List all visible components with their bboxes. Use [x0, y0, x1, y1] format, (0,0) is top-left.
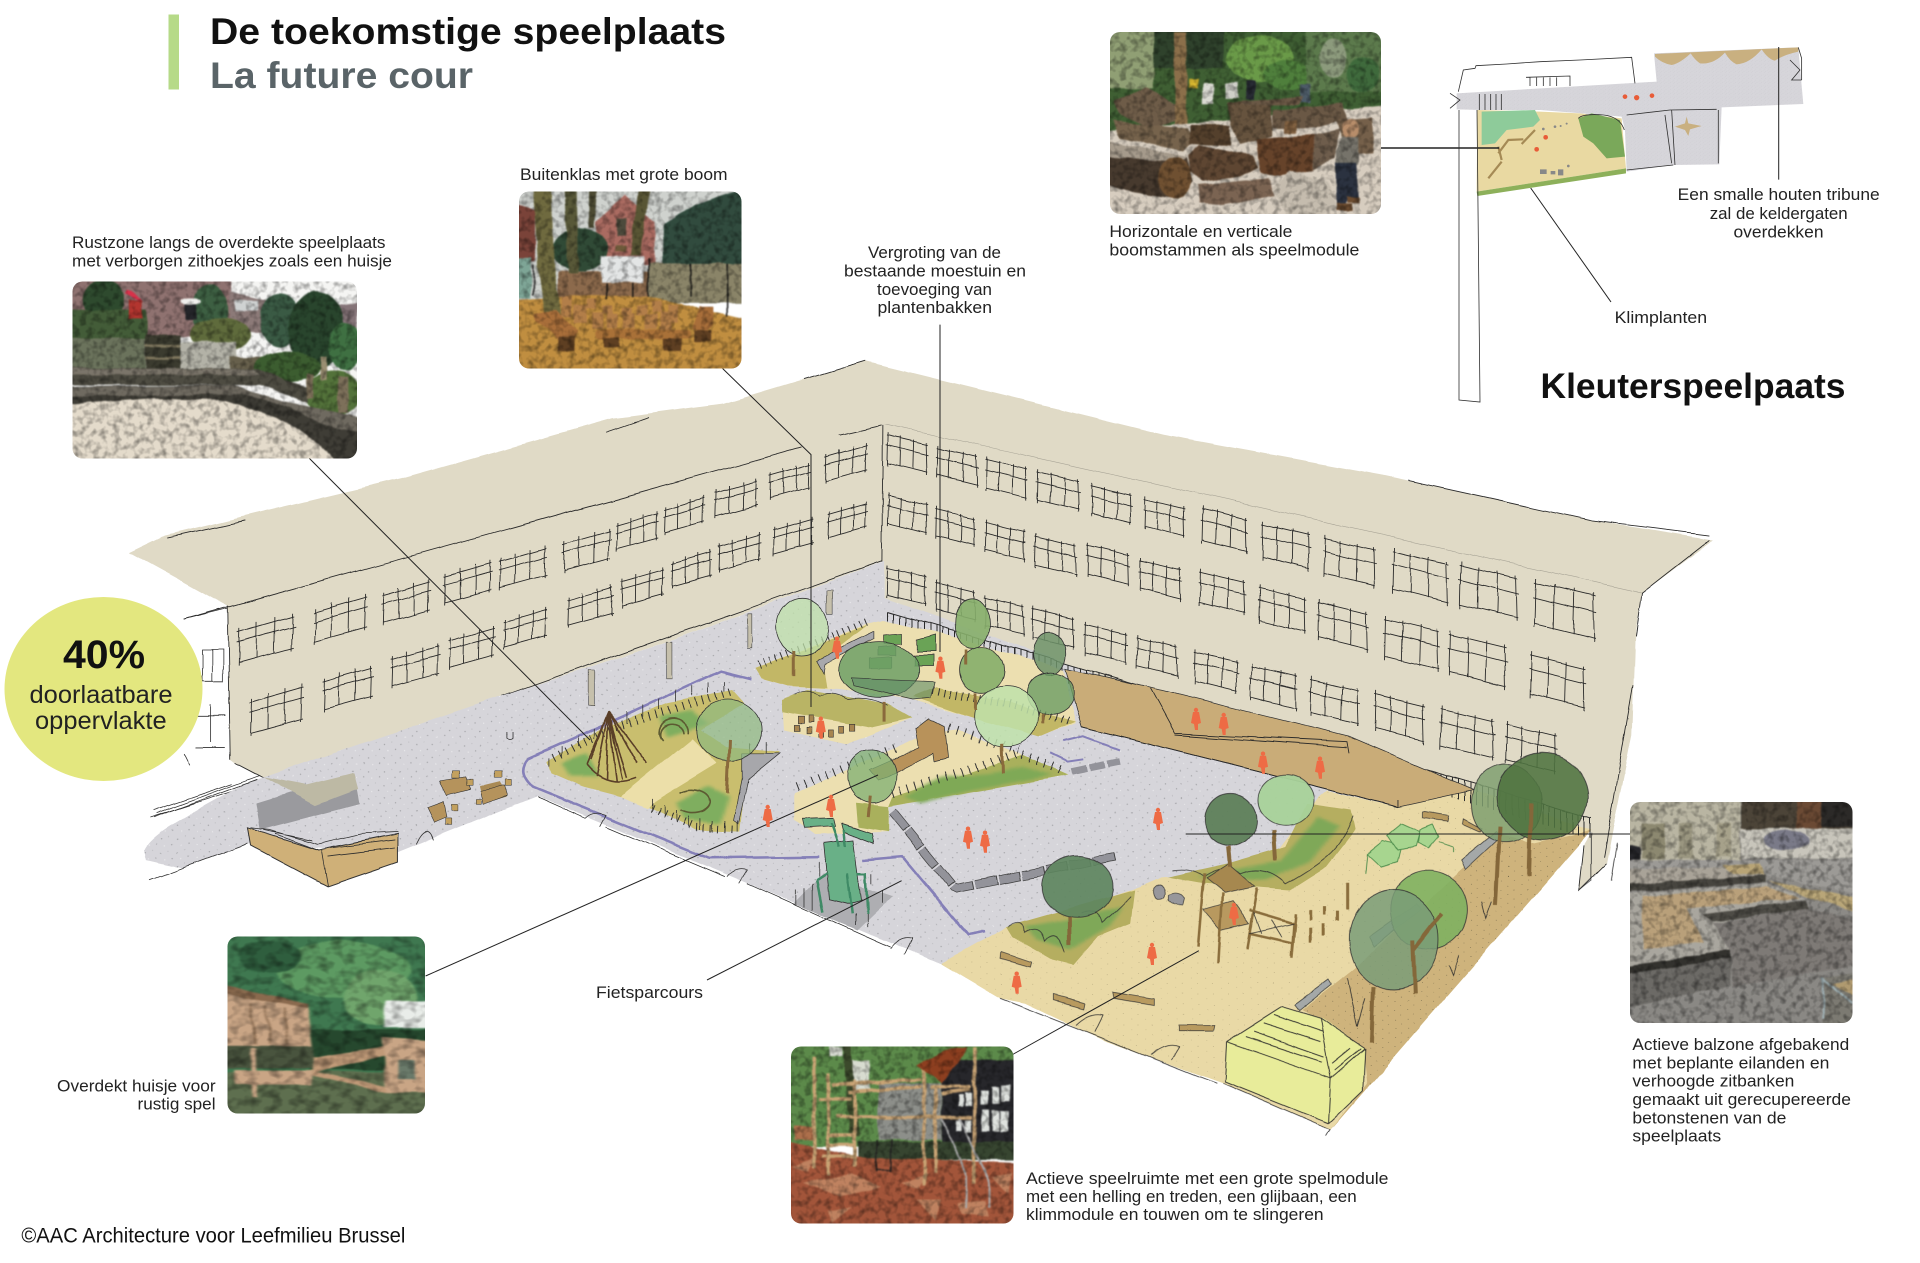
- climbing arches: [660, 718, 711, 813]
- site plan: kleuterspeelplaats: [1450, 47, 1803, 196]
- caption: huisje: [57, 1076, 216, 1114]
- fence along the wall: [888, 611, 1592, 829]
- plan paved area: [1457, 47, 1803, 172]
- plan play objects: [1488, 130, 1535, 178]
- wooden posts: [1310, 883, 1348, 942]
- leader line: rustzone: [309, 458, 590, 740]
- leader line: boomstammen: [1381, 147, 1499, 149]
- leader line: klimplanten: [1531, 188, 1611, 302]
- caption: huisje: rustig spel: [138, 1095, 216, 1114]
- plan wooden tribune: [1655, 47, 1798, 65]
- climbing hut and slide: [870, 718, 949, 780]
- picnic tables under canopy: [416, 733, 513, 844]
- small island with stumps: [782, 690, 912, 744]
- caption: boomstammen: Horizontale en verticale: [1109, 222, 1292, 241]
- caption: boomstammen: boomstammen als speelmodule: [1109, 240, 1359, 260]
- tree trunks: [1069, 803, 1531, 1042]
- right wing windows: [886, 433, 1597, 774]
- photo: buitenklas: [519, 192, 742, 368]
- title: De toekomstige speelplaats: De toekomstige speelplaats: [210, 11, 726, 52]
- children figures: [763, 636, 1325, 994]
- edge marks: [1000, 833, 1616, 1137]
- leader line: balzone: [1186, 833, 1630, 835]
- tall play structure: [1198, 864, 1296, 963]
- grass sketches: [1347, 902, 1492, 1027]
- leader line: fietsparcours: [707, 881, 902, 980]
- planting beds: [1006, 803, 1355, 965]
- caption: speelruimte: met een helling en treden, een glijbaan, een: [1026, 1187, 1357, 1206]
- photo: huisje: [228, 936, 425, 1114]
- leader line: huisje: [426, 775, 878, 976]
- credit line: ©AAC Architecture voor Leefmilieu Brussel: [21, 1224, 405, 1247]
- school building: [130, 361, 1713, 890]
- leader line: speelruimte: [1012, 951, 1199, 1055]
- plan green areas: [1482, 110, 1540, 145]
- dark sand strip: [1302, 830, 1592, 1130]
- wooden deck and ramp: [1065, 668, 1473, 807]
- left wing windows: [237, 443, 868, 736]
- sand play area: [941, 790, 1592, 1130]
- caption: balzone: gemaakt uit gerecupereerde: [1632, 1090, 1851, 1109]
- stat label line 2: oppervlakte: [35, 707, 167, 735]
- leader line: moestuin: [939, 325, 941, 652]
- heading: Kleuterspeelpaats: Kleuterspeelpaats: [1540, 367, 1846, 406]
- caption: huisje: Overdekt huisje voor: [57, 1076, 216, 1096]
- play area elements: [1000, 753, 1616, 1137]
- caption: balzone: met beplante eilanden en: [1632, 1053, 1829, 1072]
- caption: moestuin: Vergroting van de: [868, 243, 1001, 262]
- long central island with ramp: [794, 718, 1068, 835]
- caption: speelruimte: Actieve speelruimte met een grote spelmodule: [1026, 1169, 1388, 1188]
- plan outlines: [1450, 47, 1802, 170]
- trees: [1042, 753, 1588, 990]
- stat circle: 40%: [4, 597, 202, 781]
- caption: tribune: zal de keldergaten: [1710, 204, 1848, 223]
- grey pad and green sculpture: [794, 818, 892, 930]
- leader line: buitenklas: [723, 368, 811, 707]
- gate sketches along the edge: [537, 797, 913, 955]
- planting islands: [480, 590, 1120, 955]
- picnic table: [480, 782, 508, 803]
- boulders: [1154, 885, 1184, 905]
- caption: balzone: Actieve balzone afgebakend: [1632, 1035, 1849, 1054]
- photo: speelruimte: [791, 1046, 1014, 1224]
- photo: rustzone: [72, 282, 357, 458]
- stat value: 40%: [63, 633, 145, 677]
- caption: balzone: betonstenen van de: [1632, 1108, 1786, 1127]
- caption: klimplanten: Klimplanten: [1615, 308, 1707, 327]
- canopy columns: [588, 590, 833, 707]
- cycle track: [524, 672, 984, 935]
- logs and benches: [1000, 812, 1482, 1031]
- caption: balzone: speelplaats: [1632, 1126, 1721, 1146]
- stat label line 1: doorlaatbare: [30, 681, 172, 709]
- isometric courtyard drawing: [130, 361, 1713, 1137]
- green planter overlay: [851, 678, 935, 700]
- caption: balzone: [1632, 1035, 1851, 1146]
- leader line: tribune: [1778, 47, 1780, 180]
- climbing hexagons: [1365, 823, 1453, 873]
- caption: speelruimte: klimmodule en touwen om te slingeren: [1026, 1205, 1324, 1224]
- caption: buitenklas: Buitenklas met grote boom: [520, 165, 728, 184]
- caption: tribune: [1678, 185, 1880, 242]
- sketch of neighbouring facade: [149, 609, 233, 818]
- tree trunks: [727, 650, 1043, 817]
- caption: fietsparcours: Fietsparcours: [596, 983, 703, 1002]
- caption: rustzone: met verborgen zithoekjes zoals een huisje: [72, 252, 392, 270]
- photo: boomstammen: [1110, 32, 1381, 214]
- caption: moestuin: [844, 243, 1026, 317]
- caption: tribune: overdekken: [1734, 222, 1824, 242]
- stone boulder chain: [892, 737, 1120, 888]
- paved ground: [144, 561, 1408, 964]
- caption: tribune: Een smalle houten tribune: [1678, 185, 1880, 204]
- island with vegetable garden: [756, 620, 1076, 737]
- under-canopy shadow and wooden stairs: [150, 773, 398, 886]
- plan strip outline: [1459, 110, 1480, 402]
- yellow storage shed: [1224, 1007, 1365, 1123]
- caption: rustzone: [72, 233, 392, 270]
- trees: [696, 598, 1074, 803]
- island with tipi: [547, 682, 780, 832]
- caption: moestuin: bestaande moestuin en: [844, 261, 1026, 280]
- subtitle: La future cour: La future cour: [210, 55, 473, 96]
- photo: balzone: [1630, 802, 1852, 1023]
- caption: speelruimte: [1026, 1169, 1388, 1224]
- caption: moestuin: plantenbakken: [878, 298, 992, 317]
- title accent bar: [168, 14, 179, 90]
- caption: moestuin: toevoeging van: [877, 280, 992, 299]
- garden kerb: [817, 632, 874, 673]
- caption: boomstammen: [1109, 222, 1359, 260]
- caption: rustzone: Rustzone langs de overdekte speelplaats: [72, 233, 386, 252]
- tipi: [586, 712, 647, 782]
- caption: balzone: verhoogde zitbanken: [1632, 1072, 1794, 1091]
- plan sand area: [1477, 110, 1626, 192]
